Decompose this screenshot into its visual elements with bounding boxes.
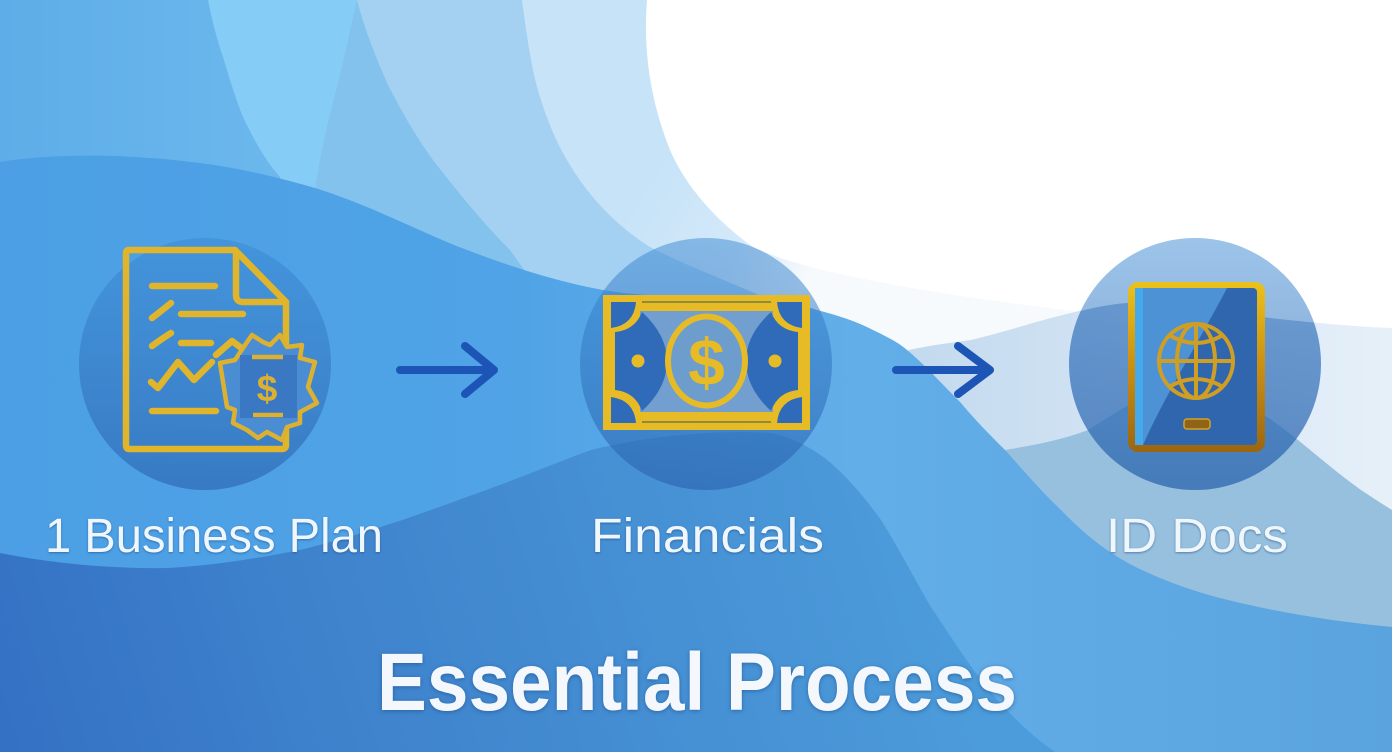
step 3: id docs [1069, 238, 1321, 554]
icon circle 1 [79, 238, 331, 490]
icon circle 3 [1069, 238, 1321, 490]
label: 1 Business Plan: 1 Business Plan [45, 510, 383, 563]
icon: banknote: $ [688, 325, 725, 399]
icon circle 2 [580, 238, 832, 490]
arrow 1 [400, 346, 494, 394]
icon: passport [1128, 282, 1265, 452]
label: Financials: Financials [591, 510, 824, 563]
step 1: business plan [45, 238, 383, 563]
icon: banknote [603, 295, 810, 430]
title: Essential Process [377, 637, 1017, 728]
step 2: financials [580, 238, 832, 563]
icon: dollar badge: $ [257, 368, 278, 409]
icon: dollar badge [220, 335, 317, 440]
arrow 2 [896, 346, 990, 394]
label: ID Docs: ID Docs [1106, 510, 1288, 563]
icon: business plan document [126, 250, 286, 449]
